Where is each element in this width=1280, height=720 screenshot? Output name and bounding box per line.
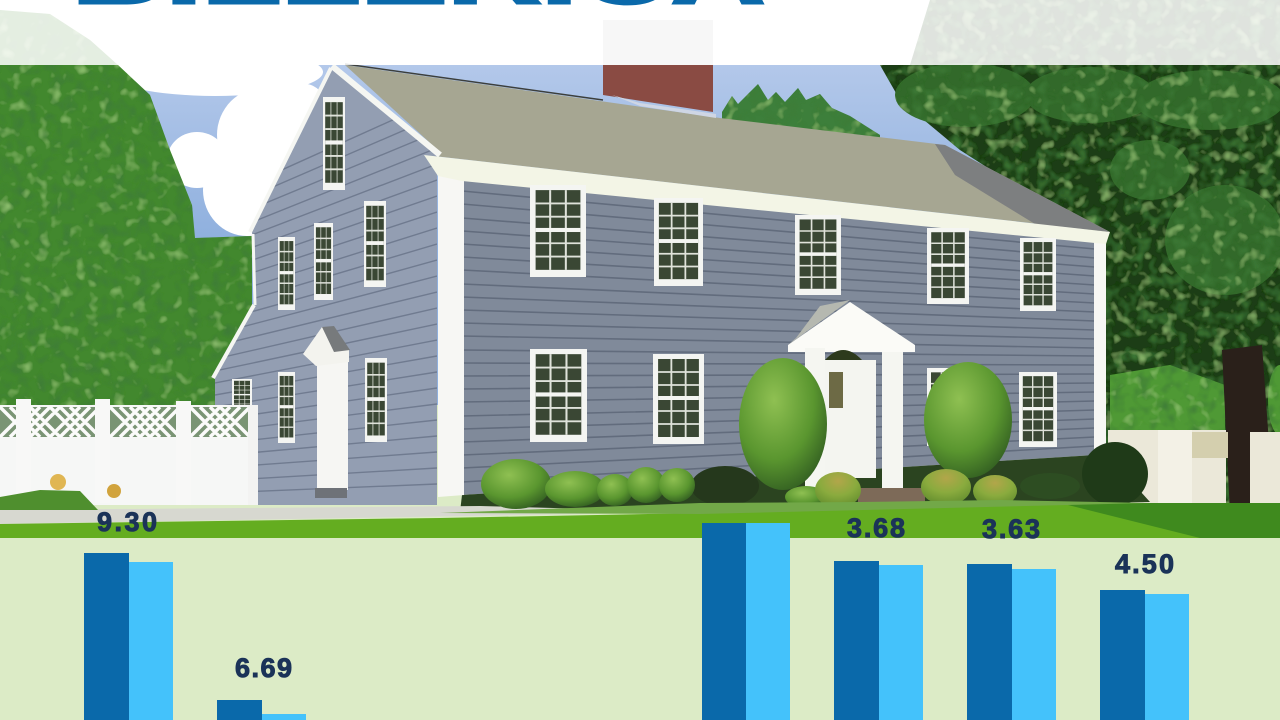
clouds bbox=[107, 48, 326, 236]
corner boards and trim bbox=[438, 168, 464, 497]
front porch bbox=[788, 300, 925, 503]
bar group 6 bbox=[1100, 590, 1189, 720]
foundation planting strip bbox=[460, 455, 1150, 512]
bar group 3 bbox=[702, 523, 790, 720]
value labels bbox=[97, 507, 1174, 683]
bar group 4 bbox=[834, 561, 923, 720]
bar group 2 bbox=[217, 700, 306, 720]
roof bbox=[345, 65, 1110, 232]
bar chart bbox=[84, 523, 1189, 720]
bar group 1 bbox=[84, 553, 173, 720]
shrubs along front wall bbox=[481, 358, 1148, 509]
side wall bbox=[215, 68, 437, 505]
left fence bbox=[0, 399, 258, 505]
front wall bbox=[462, 178, 1095, 495]
right tree bbox=[880, 0, 1280, 515]
ground: lawn bbox=[0, 500, 1280, 538]
windows: front lower row bbox=[530, 349, 1057, 447]
value: 6.69: 6.69 bbox=[235, 653, 292, 683]
ground: driveway bbox=[0, 506, 700, 524]
value: 3.68: 3.68 bbox=[847, 513, 905, 543]
background: sky bbox=[0, 0, 1280, 405]
value: 3.63: 3.63 bbox=[982, 514, 1040, 544]
house bbox=[213, 20, 1150, 512]
distant trees behind roof bbox=[722, 84, 880, 160]
panel: chart background bbox=[0, 538, 1280, 720]
side door bbox=[303, 326, 350, 498]
header band: translucent white overlay bbox=[0, 0, 1280, 65]
bar group 5 bbox=[967, 564, 1056, 720]
chimney bbox=[603, 20, 716, 118]
left shrubs along fence bbox=[0, 474, 121, 510]
left tree bbox=[0, 10, 252, 410]
windows: gable side bbox=[232, 97, 387, 443]
right fence bbox=[1108, 430, 1280, 505]
windows: front upper row bbox=[530, 185, 1056, 311]
value: 4.50: 4.50 bbox=[1115, 549, 1174, 579]
value: 9.30: 9.30 bbox=[97, 507, 157, 537]
